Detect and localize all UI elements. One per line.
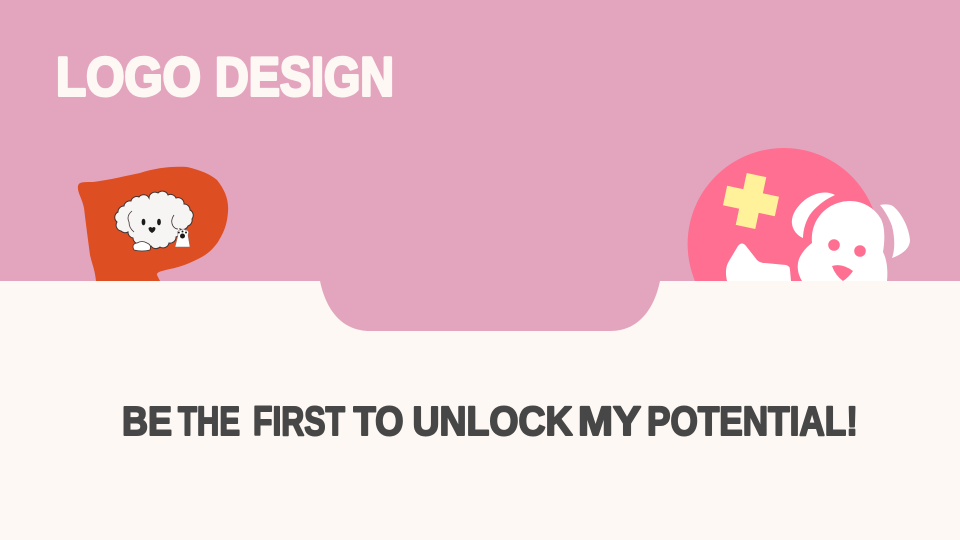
icon: pink circle with cross, cat and dog xyxy=(688,148,910,281)
dog nose xyxy=(832,265,853,281)
title: LOGO xyxy=(56,46,201,108)
tagline xyxy=(122,398,858,444)
poodle foot xyxy=(133,242,151,251)
orange blob xyxy=(78,167,228,281)
title xyxy=(56,46,394,108)
yellow cross xyxy=(720,170,782,232)
cat xyxy=(726,244,791,281)
poodle ear lines xyxy=(128,211,178,232)
dog right ear xyxy=(880,204,910,258)
tagline: POTENTIAL! xyxy=(647,398,858,444)
dog eyes xyxy=(828,239,866,257)
tagline: FIRST xyxy=(253,398,345,444)
tagline: TO xyxy=(354,398,404,444)
poodle xyxy=(115,191,193,251)
tagline: MY xyxy=(578,398,641,444)
dog left ear xyxy=(792,192,835,238)
poodle face xyxy=(142,219,161,233)
dog head xyxy=(798,201,887,281)
tagline: UNLOCK xyxy=(412,398,572,444)
poodle body xyxy=(115,191,193,249)
icon: orange blob with poodle xyxy=(78,167,228,281)
pink circle xyxy=(688,148,887,281)
tagline: BE xyxy=(122,398,172,444)
tagline: THE xyxy=(178,398,240,444)
pink header panel with notch xyxy=(0,0,960,331)
poodle paw xyxy=(175,229,190,247)
title: DESIGN xyxy=(215,46,394,108)
